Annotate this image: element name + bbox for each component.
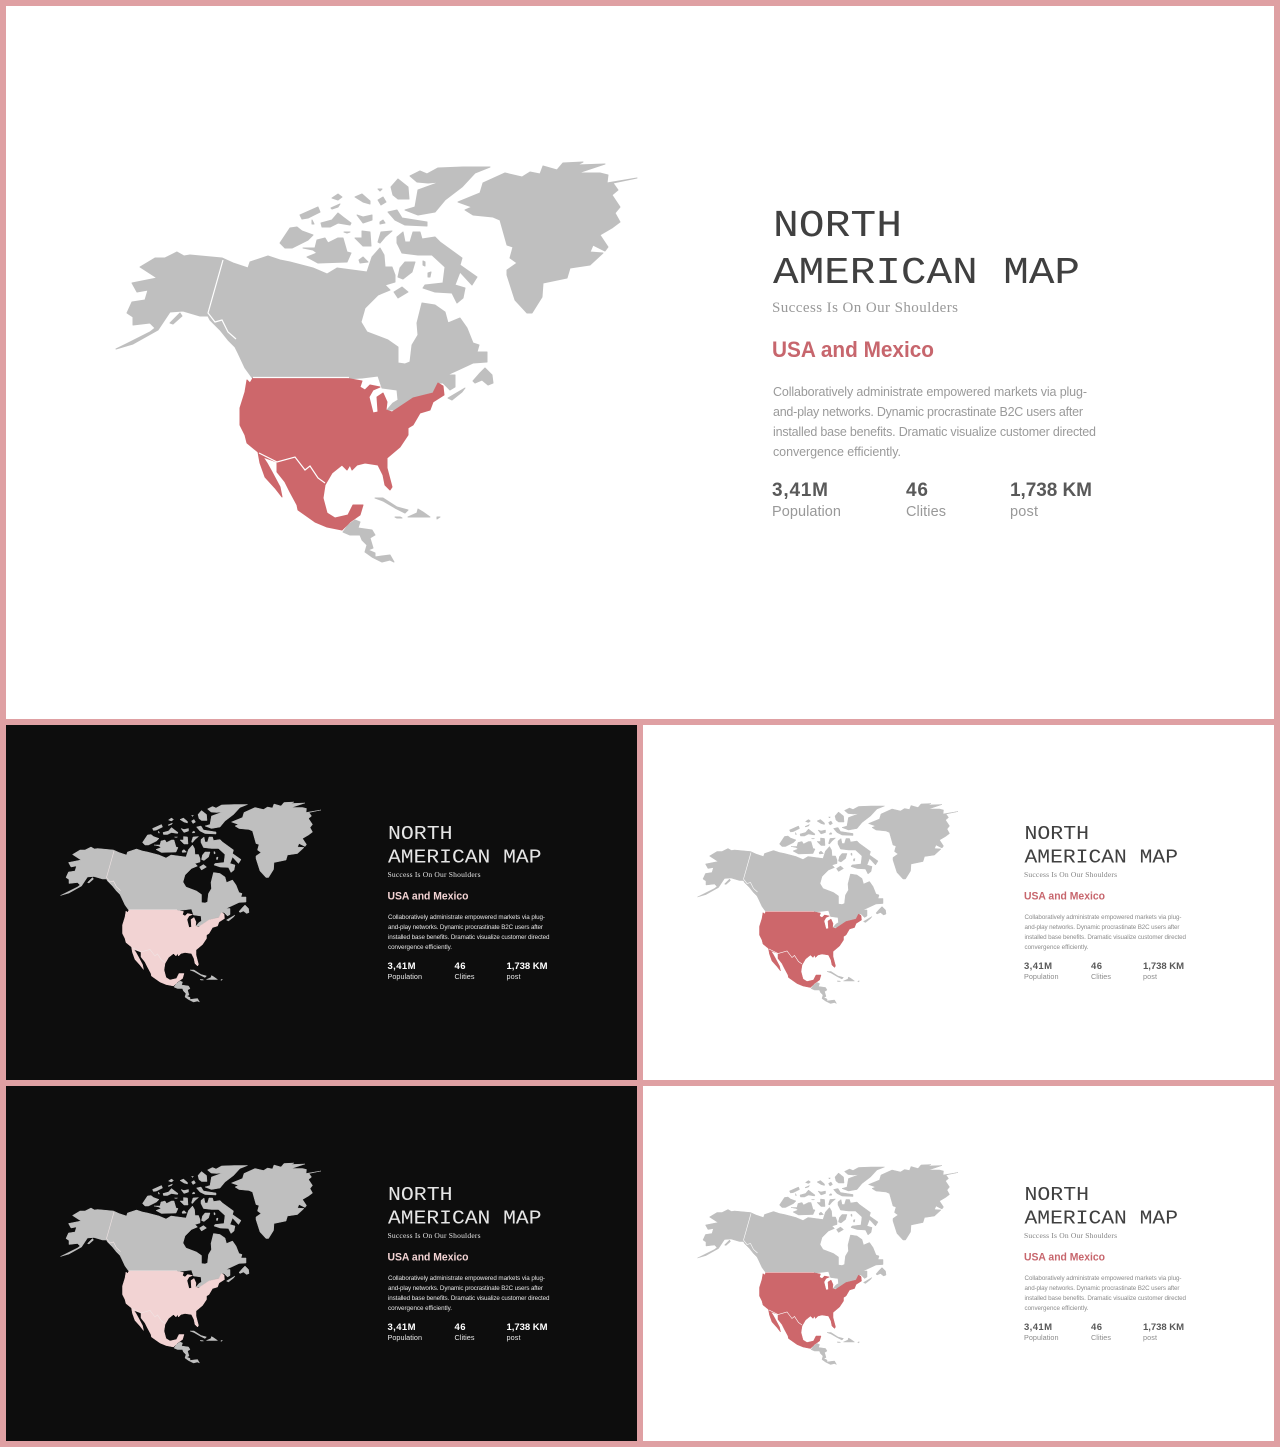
panel background xyxy=(643,725,1274,1080)
map: light variant xyxy=(698,1164,958,1364)
body text xyxy=(388,914,550,951)
stat: population: Population xyxy=(388,1333,422,1342)
body text: and-play networks. Dynamic procrastinate B2C users after xyxy=(388,1285,543,1292)
panel: light slide top right xyxy=(643,725,1274,1080)
body text: convergence efficiently. xyxy=(773,445,901,459)
stat: population: 3,41M xyxy=(1024,1322,1052,1333)
slide text xyxy=(388,1184,550,1342)
title: NORTH xyxy=(1024,1184,1089,1206)
title xyxy=(1024,823,1178,868)
panel: dark slide bottom left xyxy=(6,1086,637,1441)
title: AMERICAN MAP xyxy=(388,846,542,868)
title xyxy=(388,1184,542,1230)
slide text xyxy=(1024,823,1187,981)
body text: and-play networks. Dynamic procrastinate B2C users after xyxy=(388,924,543,931)
subtitle: Success Is On Our Shoulders xyxy=(388,870,481,879)
stat: population: 3,41M xyxy=(388,961,416,972)
stat: population xyxy=(1024,961,1058,981)
subtitle: Success Is On Our Shoulders xyxy=(388,1231,481,1240)
body text xyxy=(1024,1275,1187,1312)
stat: post xyxy=(506,961,548,981)
body text: and-play networks. Dynamic procrastinate B2C users after xyxy=(773,405,1083,419)
body text: installed base benefits. Dramatic visualize customer directed xyxy=(388,1295,550,1302)
heading: USA and Mexico xyxy=(772,337,934,362)
body text xyxy=(388,1275,550,1312)
stat: post: post xyxy=(1143,972,1157,981)
title: NORTH xyxy=(388,823,452,845)
title xyxy=(388,823,542,868)
body text: Collaboratively administrate empowered markets via plug- xyxy=(773,385,1087,399)
stat: cities: 46 xyxy=(1091,961,1102,972)
subtitle: Success Is On Our Shoulders xyxy=(1024,870,1117,879)
stat: cities: 46 xyxy=(454,961,466,972)
subtitle: Success Is On Our Shoulders xyxy=(772,300,958,316)
title: AMERICAN MAP xyxy=(1024,1208,1178,1230)
stat: cities: Clities xyxy=(906,504,946,520)
stat: post xyxy=(1143,1322,1184,1342)
title xyxy=(773,205,1080,295)
stat: population: Population xyxy=(1024,1333,1058,1342)
stat: cities: 46 xyxy=(1091,1322,1102,1333)
body text: installed base benefits. Dramatic visualize customer directed xyxy=(1024,1295,1187,1302)
stat: cities xyxy=(1091,961,1111,981)
body text: convergence efficiently. xyxy=(1024,1305,1089,1312)
stat: cities xyxy=(454,961,475,981)
title: AMERICAN MAP xyxy=(388,1208,542,1230)
stat: cities: Clities xyxy=(1091,1333,1111,1342)
stat: population: 3,41M xyxy=(388,1322,416,1333)
body text: installed base benefits. Dramatic visualize customer directed xyxy=(1024,934,1187,941)
panel background xyxy=(6,1086,637,1441)
title: NORTH xyxy=(1024,823,1089,845)
title: AMERICAN MAP xyxy=(1024,846,1178,868)
stat: cities xyxy=(454,1322,475,1342)
stat: population xyxy=(1024,1322,1058,1342)
stat: cities: Clities xyxy=(1091,972,1111,981)
stat: population xyxy=(772,480,841,520)
body text: convergence efficiently. xyxy=(388,1305,452,1312)
panel: dark slide top left xyxy=(6,725,637,1080)
stat: post: 1,738 KM xyxy=(1010,480,1092,501)
slide text xyxy=(1024,1184,1187,1342)
body text xyxy=(773,385,1096,459)
body text: Collaboratively administrate empowered markets via plug- xyxy=(1024,914,1182,921)
stat: post: post xyxy=(1010,504,1038,520)
body text: Collaboratively administrate empowered markets via plug- xyxy=(388,1275,545,1282)
panel background xyxy=(6,725,637,1080)
stat: population xyxy=(388,1322,422,1342)
stat: post: post xyxy=(506,1333,520,1342)
body text: and-play networks. Dynamic procrastinate B2C users after xyxy=(1024,924,1180,931)
title xyxy=(1024,1184,1178,1230)
stat: cities: Clities xyxy=(454,1333,475,1342)
body text: installed base benefits. Dramatic visualize customer directed xyxy=(773,425,1096,439)
panel background xyxy=(6,6,1274,719)
title: NORTH xyxy=(773,205,902,248)
heading: USA and Mexico xyxy=(388,1252,469,1264)
stat: cities: 46 xyxy=(906,480,928,501)
stat: population: Population xyxy=(388,972,422,981)
heading: USA and Mexico xyxy=(1024,1252,1105,1264)
map: dark variant xyxy=(60,802,321,1002)
panel background xyxy=(643,1086,1274,1441)
subtitle: Success Is On Our Shoulders xyxy=(1024,1231,1117,1240)
stat: post: post xyxy=(506,972,520,981)
stat: cities: 46 xyxy=(454,1322,466,1333)
map: North America, USA and Mexico highlighted xyxy=(116,162,637,562)
map: light variant xyxy=(698,804,958,1004)
stat: cities xyxy=(1091,1322,1111,1342)
map: dark variant xyxy=(60,1163,321,1363)
stat: post: 1,738 KM xyxy=(506,1322,548,1333)
stat: cities: Clities xyxy=(454,972,475,981)
body text: Collaboratively administrate empowered markets via plug- xyxy=(1024,1275,1182,1282)
title: AMERICAN MAP xyxy=(773,252,1080,295)
stat: population: 3,41M xyxy=(1024,961,1052,972)
stat: post: post xyxy=(1143,1333,1157,1342)
body text: and-play networks. Dynamic procrastinate B2C users after xyxy=(1024,1285,1180,1292)
stat: population: 3,41M xyxy=(772,480,828,501)
stat: post xyxy=(506,1322,548,1342)
stat: post: 1,738 KM xyxy=(1143,1322,1184,1333)
stat: population: Population xyxy=(1024,972,1058,981)
stat: post xyxy=(1143,961,1184,981)
body text: convergence efficiently. xyxy=(1024,944,1089,951)
panel: main light slide xyxy=(6,6,1274,719)
stat: post xyxy=(1010,480,1092,520)
body text: convergence efficiently. xyxy=(388,944,452,951)
stat: population xyxy=(388,961,422,981)
body text: Collaboratively administrate empowered markets via plug- xyxy=(388,914,545,921)
stat: post: 1,738 KM xyxy=(1143,961,1184,972)
title: NORTH xyxy=(388,1184,452,1206)
stat: post: 1,738 KM xyxy=(506,961,548,972)
stat: cities xyxy=(906,480,946,520)
heading: USA and Mexico xyxy=(1024,890,1105,902)
slide text xyxy=(388,823,550,981)
body text: installed base benefits. Dramatic visualize customer directed xyxy=(388,934,550,941)
panel: light slide bottom right xyxy=(643,1086,1274,1441)
body text xyxy=(1024,914,1187,951)
heading: USA and Mexico xyxy=(388,890,469,902)
stat: population: Population xyxy=(772,504,841,520)
